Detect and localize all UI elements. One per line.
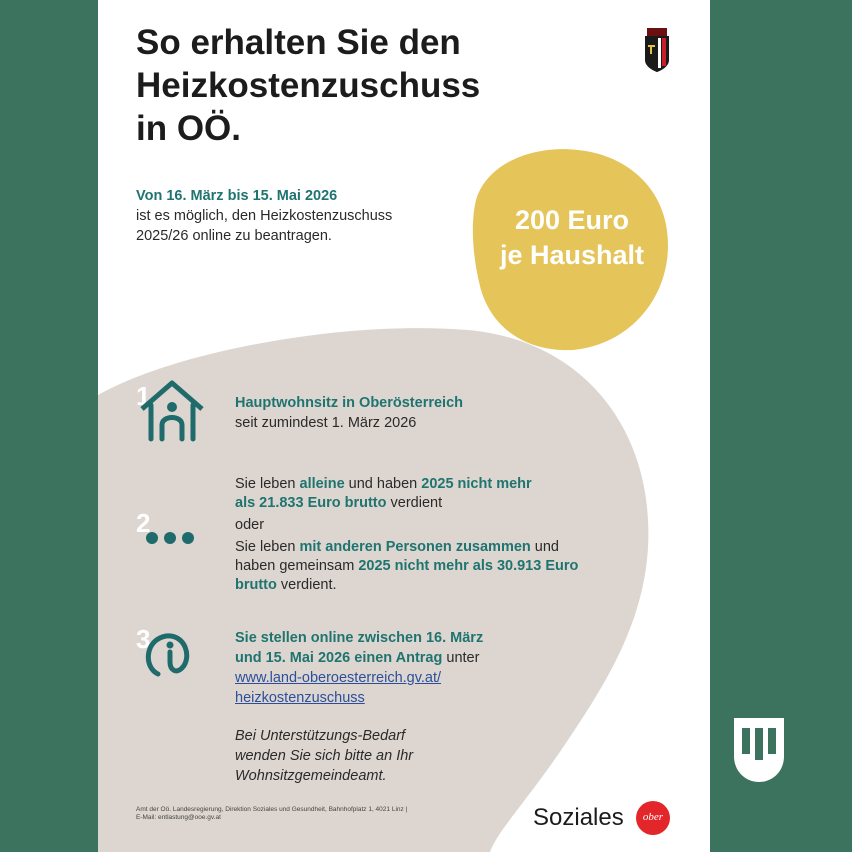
text: step 3 bbox=[235, 630, 483, 784]
step 3 bbox=[136, 624, 483, 784]
icon: info bbox=[136, 624, 190, 676]
text: step 3: www.land-oberoesterreich.gv.at/ bbox=[235, 670, 441, 686]
text: date range: Von 16. März bis 15. Mai 2026 bbox=[136, 188, 337, 204]
icon: dots: 2 bbox=[136, 508, 150, 538]
text: step 2: als 21.833 Euro brutto verdient Sie leben mit anderen Personen zusammen und bbox=[235, 495, 559, 555]
step 2 bbox=[136, 476, 578, 593]
logo: Soziales bbox=[533, 801, 670, 835]
text: step 1 bbox=[235, 395, 463, 431]
step 1 bbox=[136, 380, 463, 442]
text: step 3: Bei Unterstützungs-Bedarf bbox=[235, 728, 405, 744]
title: Heizkostenzuschuss bbox=[136, 66, 480, 105]
title: So erhalten Sie den bbox=[136, 23, 461, 62]
callout: 200 Euro: 200 Euro bbox=[515, 205, 629, 235]
icon: white shield logo bbox=[734, 718, 784, 782]
icon: coat of arms bbox=[645, 28, 669, 72]
icon: house: 1 bbox=[136, 381, 150, 411]
icon: house bbox=[136, 380, 204, 442]
text: step 3: heizkostenzuschuss bbox=[235, 690, 365, 706]
footer address: E-Mail: entlastung@ooe.gv.at bbox=[136, 814, 221, 821]
text: step 2 bbox=[235, 476, 578, 593]
logo: Soziales: ober bbox=[643, 811, 664, 823]
logo: Soziales: Soziales bbox=[533, 804, 624, 831]
title: in OÖ. bbox=[136, 109, 241, 148]
text: step 3: und 15. Mai 2026 einen Antrag unter bbox=[235, 650, 479, 666]
text: step 3: Sie stellen online zwischen 16. März bbox=[235, 630, 483, 646]
callout: 200 Euro: je Haushalt bbox=[500, 240, 644, 270]
text: step 2: oder bbox=[235, 517, 264, 533]
text: date range bbox=[136, 188, 392, 244]
text: step 2: brutto verdient. bbox=[235, 577, 337, 593]
text: step 2: Sie leben alleine und haben 2025 nicht mehr bbox=[235, 476, 532, 492]
panel: white poster page bbox=[98, 0, 710, 852]
text: step 3: wenden Sie sich bitte an Ihr bbox=[235, 748, 413, 764]
text: step 2: haben gemeinsam 2025 nicht mehr als 30.913 Euro bbox=[235, 558, 578, 574]
background blobs bbox=[98, 149, 668, 852]
text: date range: ist es möglich, den Heizkostenzuschuss bbox=[136, 208, 392, 224]
callout: 200 Euro bbox=[500, 205, 644, 270]
icon: dots bbox=[136, 508, 194, 544]
text: step 3: Wohnsitzgemeindeamt. bbox=[235, 768, 387, 784]
footer address bbox=[136, 806, 407, 821]
text: date range: 2025/26 online zu beantragen. bbox=[136, 228, 332, 244]
icon: info: 3 bbox=[136, 624, 150, 654]
title bbox=[136, 23, 480, 148]
footer address: Amt der Oö. Landesregierung, Direktion Soziales und Gesundheit, Bahnhofplatz 1, 4021 Linz | bbox=[136, 806, 407, 813]
text: step 1: Hauptwohnsitz in Oberösterreich bbox=[235, 395, 463, 411]
text: step 1: seit zumindest 1. März 2026 bbox=[235, 415, 416, 431]
